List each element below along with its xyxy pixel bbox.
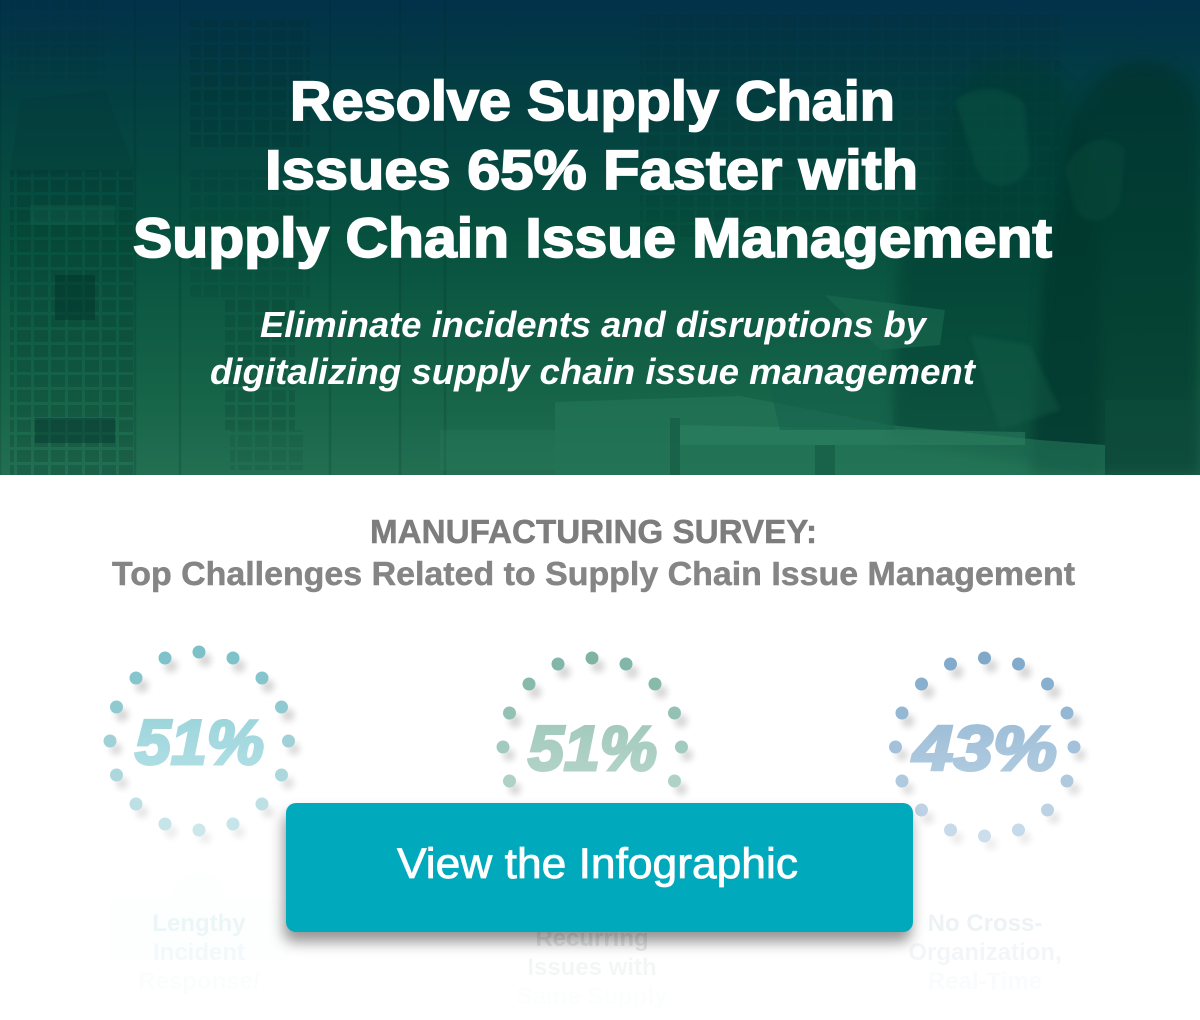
photo: upper mesh behind people — [640, 15, 1060, 240]
button label: View the Infographic — [397, 840, 798, 888]
subtitle: digitalizing supply chain issue management — [210, 351, 977, 392]
photo: two people at a table — [825, 60, 1200, 475]
heading: manufacturing survey — [112, 513, 1075, 592]
title — [133, 69, 1052, 269]
photo: workbench and laptop — [555, 396, 1105, 475]
faint icon arch — [110, 873, 290, 960]
stat: 43% no cross-organization — [889, 652, 1086, 995]
label: recurring issues with same supply — [517, 925, 668, 1010]
subtitle: Eliminate incidents and disruptions by — [260, 304, 928, 345]
panel: hero banner with photo background — [0, 0, 1200, 475]
dotted ring 1 — [104, 646, 300, 844]
label: lengthy incident response — [138, 910, 260, 995]
heading: manufacturing survey: Top Challenges Related to Supply Chain Issue Management — [112, 555, 1075, 592]
label: no cross-organization real-time: Organization, — [908, 939, 1062, 966]
number 43%: 43% — [911, 714, 1057, 784]
number 51% second: 51% — [528, 714, 657, 784]
label: no cross-organization real-time: Real-Time — [928, 968, 1042, 995]
stat: 51% lengthy incident response — [104, 646, 300, 995]
label: lengthy incident response: Response/ — [138, 968, 260, 995]
label: lengthy incident response: Incident — [153, 939, 245, 966]
heading: manufacturing survey: MANUFACTURING SURVEY: — [370, 513, 817, 550]
title: Resolve Supply Chain — [290, 69, 895, 132]
photo: machinery racks on left — [0, 168, 446, 475]
subtitle — [210, 304, 977, 392]
button: view the infographic — [286, 803, 913, 932]
label: recurring issues with same supply: Issues with — [527, 954, 657, 981]
stat: 51% recurring issues — [496, 652, 693, 1010]
label: recurring issues with same supply: Recurring — [535, 925, 649, 952]
title: Supply Chain Issue Management — [133, 206, 1052, 269]
label: no cross-organization real-time: No Cross- — [928, 910, 1042, 937]
number 51%: 51% — [135, 708, 264, 778]
label: no cross-organization real-time — [908, 910, 1062, 995]
label: recurring issues with same supply: Same Supply — [517, 983, 668, 1010]
label: lengthy incident response: Lengthy — [152, 910, 246, 937]
title: Issues 65% Faster with — [265, 138, 918, 201]
dotted ring 3 — [889, 652, 1086, 850]
dotted ring 2 — [496, 652, 693, 816]
